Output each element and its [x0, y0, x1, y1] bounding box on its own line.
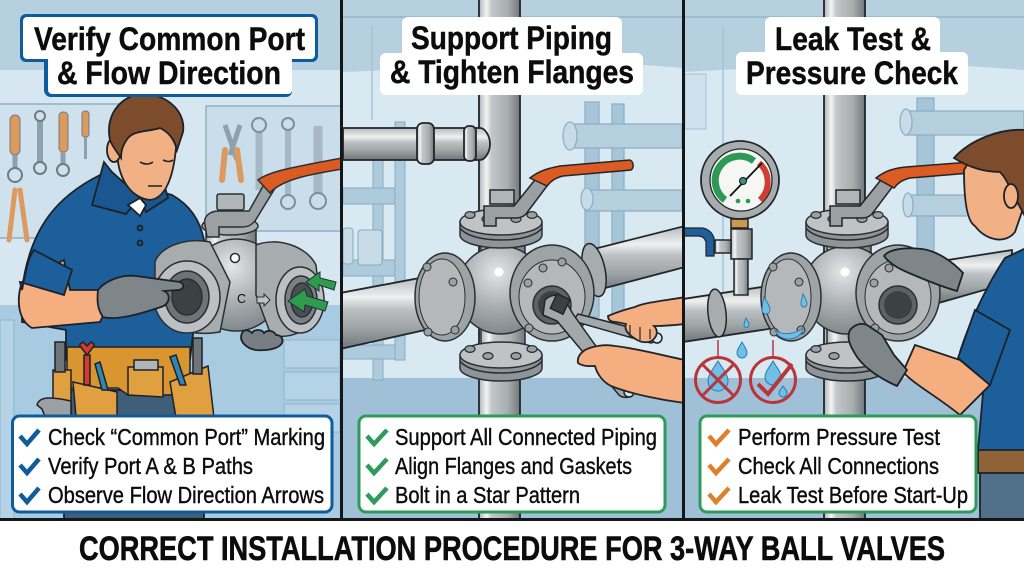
pipe ring: [706, 288, 728, 338]
handle and stem: [484, 160, 633, 226]
handle and stem: [830, 162, 970, 226]
icon: green flow arrows: [288, 272, 336, 312]
pressure gauge: [701, 141, 779, 219]
3-way flanged valve: [761, 209, 940, 381]
checklist: support piping: Align Flanges and Gaskets: [395, 453, 632, 479]
worker: tool belt: [37, 338, 214, 419]
worker: arm and gloves: [19, 250, 283, 350]
background pipes and rack, right: [563, 102, 682, 319]
panel: support piping: [340, 0, 685, 523]
background shelving, left: [343, 122, 405, 380]
checklist: leak test: Leak Test Before Start-Up: [738, 482, 968, 508]
valve markings: C: [237, 291, 246, 306]
gauge fitting: [715, 219, 752, 295]
vertical pipe: [824, 0, 865, 523]
connected pipe, right: [596, 226, 682, 289]
icon: leak prohibited: [696, 340, 773, 402]
checklist: verify common port: Observe Flow Direction Arrows: [48, 482, 324, 508]
hands: [578, 297, 685, 403]
heading: leak test: Leak Test &: [775, 21, 931, 57]
connected pipe, right: [935, 250, 1012, 304]
checklist: leak test: Perform Pressure Test: [738, 424, 941, 450]
heading: support piping: [380, 17, 643, 95]
connected pipe, left: [340, 277, 425, 349]
wall and floor background: [685, 0, 1024, 519]
wall and floor background: [343, 0, 682, 519]
worker: pants and shirt: [22, 162, 204, 525]
checklist: verify common port: Check “Common Port” Marking: [48, 424, 325, 450]
pipe flange ring, right: [581, 242, 607, 298]
water drops and wet flange: [737, 294, 807, 358]
heading: leak test: Pressure Check: [746, 55, 958, 91]
vertical pipe: [479, 0, 520, 523]
pegboard with tools, left: [0, 104, 123, 240]
background rack and pipes: [899, 97, 1024, 252]
heading: verify common port: & Flow Direction: [57, 55, 281, 91]
connected pipe, left: [683, 285, 775, 342]
checklist: leak test: [700, 416, 976, 512]
icon: leak checked: [750, 358, 796, 402]
checklist: verify common port: Verify Port A & B Paths: [48, 453, 253, 479]
panel: leak test: [683, 0, 1024, 523]
checklist: support piping: [359, 416, 665, 512]
technician head: [954, 130, 1024, 240]
checklist: support piping: Support All Connected Piping: [395, 424, 657, 450]
panel: verify common port: [0, 0, 342, 525]
checklist: verify common port: [12, 416, 332, 512]
pegboard with tools, right: [206, 106, 342, 231]
technician body: [903, 248, 1024, 522]
heading: leak test: [736, 17, 968, 95]
technician gloves: [849, 248, 963, 386]
blue isolation handle: [683, 228, 714, 256]
wall background: [0, 0, 340, 519]
heading: verify common port: [20, 14, 318, 97]
heading: support piping: & Tighten Flanges: [390, 54, 634, 90]
checklist: leak test: Check All Connections: [738, 453, 939, 479]
3-way flanged valve: [415, 209, 594, 381]
valve markings: [237, 291, 270, 306]
worker: head: [107, 94, 183, 200]
checklist: support piping: Bolt in a Star Pattern: [395, 482, 580, 508]
wrenches: [543, 294, 662, 397]
valve in hands: [154, 158, 342, 336]
heading: support piping: Support Piping: [411, 20, 612, 56]
heading: verify common port: Verify Common Port: [34, 21, 305, 57]
horizontal pipe, upper left: [343, 123, 490, 164]
